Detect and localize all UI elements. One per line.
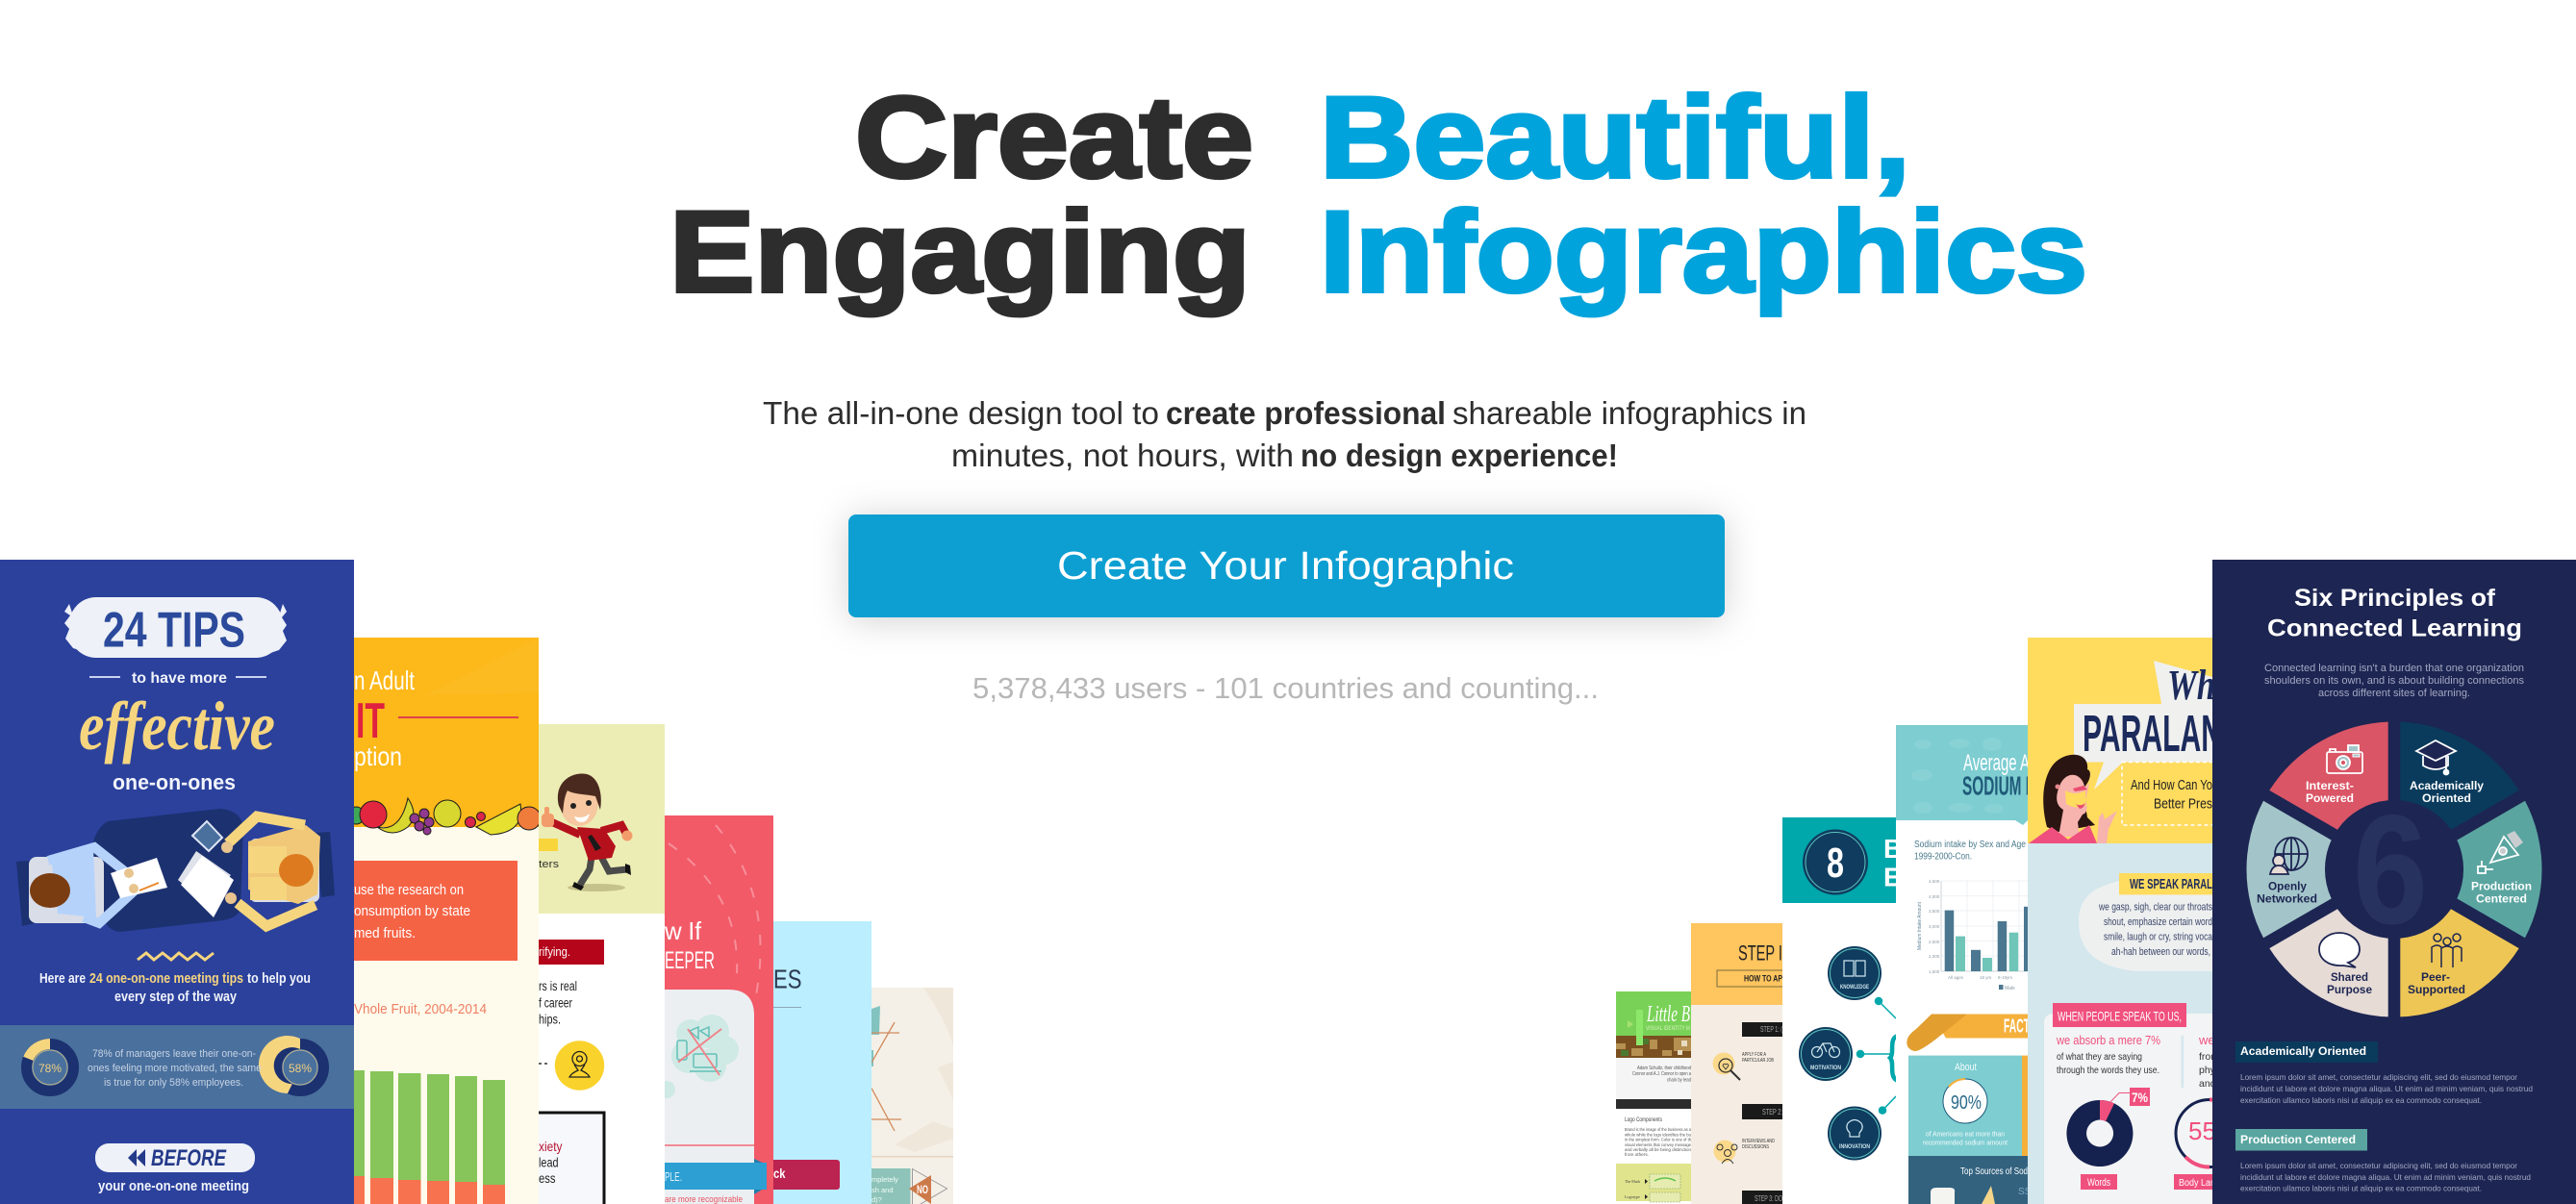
sodium title [1962,750,2030,800]
production centered label: Production Centered [2240,1135,2356,1146]
headline: Engaging [669,188,1250,316]
yellow dashed subtitle box: Better Pres [2154,797,2212,813]
motivation badge [1799,1027,1853,1081]
call to action button: Create Your Infographic [1057,543,1514,588]
stacked bars [354,1070,505,1204]
little b title: Little B [1646,1002,1690,1027]
crimson button: ck [773,1166,786,1181]
six principles title: Six Principles of [2294,585,2496,612]
blue card title: ES [773,964,802,994]
logo components text: in the simplest form. Color is one of th [1625,1137,1691,1142]
card: eight elements [1782,817,1903,1204]
academically oriented text: incididunt ut labore et dolore magna aliqua. Ut enim ad minim veniam, quis nostrud [2240,1084,2533,1093]
subtitle: no design experience! [1301,438,1618,473]
ellipsis dashes [539,1063,547,1065]
script word: Wh [2167,662,2215,709]
teal note [871,1168,910,1204]
lime legend: The Mark [1625,1179,1641,1184]
card: light blue [773,921,871,1204]
band text: 78% of managers leave their one-on- [92,1048,256,1060]
90 percent panel: 90% [1951,1092,1982,1114]
we speak label: WE SPEAK PARAL [2130,876,2212,892]
step 2 caption: DISCUSSIONS [1742,1144,1770,1150]
step tags: STEP 3: DO [1755,1194,1782,1203]
words label: Words [2087,1177,2110,1189]
segment labels: Openly [2268,880,2307,893]
red card title: EEPER [665,947,715,974]
pink heading [2053,1003,2186,1027]
body text [539,979,577,1027]
sodium bar chart: 1,500 [1929,969,1940,974]
blue banner [665,1159,767,1194]
teal header [1896,725,2028,825]
facts ribbon: FACT [2004,1016,2030,1038]
knowledge badge: KNOWLEDGE [1840,985,1869,991]
step title: STEP I [1738,941,1782,966]
top sources panel: SS [2018,1187,2032,1197]
wheel diagram [2246,722,2542,1016]
divider [2182,1036,2184,1088]
faint food icons [1911,738,2004,814]
intro text: 24 one-on-one meeting tips [89,971,243,987]
body language text [2198,1033,2216,1090]
pink rule [665,1144,754,1146]
meeting illustration [16,809,335,932]
top sources panel: Top Sources of Sod [1960,1166,2028,1177]
step tags: STEP 2: [1762,1108,1782,1116]
intro panel: chain by lead [1667,1077,1691,1083]
no decision [909,1169,947,1204]
pie: words 7 percent [2066,1088,2150,1166]
intro panel [1616,1058,1691,1099]
academically oriented label [2235,1041,2378,1063]
arrow [1628,1020,1633,1028]
red tab: rifying. [539,944,570,959]
how to box [1717,970,1794,987]
card: six principles [2212,560,2576,1204]
segment labels: Supported [2408,983,2465,996]
segment labels: Shared [2331,970,2368,984]
body language label [2174,1174,2222,1190]
production centered text: incididunt ut labore et dolore magna aliqua. Ut enim ad minim veniam, quis nostrud [2240,1172,2531,1182]
ring: body language 55 percent: 55 [2188,1116,2216,1145]
zigzag [138,953,214,960]
framed box: lead [539,1154,558,1169]
words text: we absorb a mere 7% [2056,1033,2160,1047]
production centered text: Lorem ipsum dolor sit amet, consectetur adipiscing elit, sed do eiusmod tempor [2240,1161,2517,1170]
headline [669,73,2087,316]
90 percent panel: of Americans eat more than [1926,1130,2005,1139]
dashed arcs [669,825,761,995]
we speak label [2079,873,2225,971]
framed box [539,1112,606,1204]
big six numeral: 6 [2353,783,2428,957]
body language text: we [2198,1033,2215,1047]
body text: f career [539,996,572,1010]
effective script: effective [79,688,275,765]
body language text: phy [2199,1065,2216,1076]
icon: globe and person [2270,838,2308,874]
subtitle: shareable infographics in [1452,395,1806,431]
icon: magnifier heart [1712,1052,1740,1080]
intro panel: Connor and A.J. Connor to open a [1632,1071,1691,1077]
teal shapes [871,1006,880,1066]
chart title: Vhole Fruit, 2004-2014 [354,1002,487,1017]
speech bubble [2074,661,2212,790]
research box [354,861,518,961]
subtitle: minutes, not hours, with [951,438,1294,473]
icon: people [1714,1141,1737,1164]
framed box: xiety [539,1139,562,1154]
yellow dashed subtitle box: And How Can Yo [2131,778,2212,793]
intro text: Here are [39,971,86,987]
fruit title: n Adult [354,665,415,695]
how to box: HOW TO AP [1744,973,1782,983]
segment labels: Peer- [2421,970,2450,984]
user count: 5,378,433 users - 101 countries and counting... [972,671,1599,705]
step 2 caption [1742,1139,1775,1150]
intro panel: Adam Schultz, their childhood [1637,1066,1691,1071]
number badge: 8 [1827,840,1844,887]
subtitle: The all-in-one design tool to [763,395,1159,431]
sodium bar chart: Medium Intake Amount [1917,901,1923,950]
body language text: and [2199,1078,2216,1090]
subtitle: create professional [1166,395,1446,431]
intro text [39,971,311,1005]
call to action button [848,514,1725,617]
facts ribbon [1907,1014,2030,1051]
before badge: BEFORE [151,1145,227,1171]
sodium bar chart: 2,500 [1929,940,1940,944]
intro text: to help you [247,971,311,987]
90 percent panel: recommended sodium amount [1923,1139,2008,1146]
90 percent panel [1908,1056,2028,1156]
one-on-ones: one-on-ones [113,770,236,794]
card: beige flowchart [871,988,953,1204]
rule [871,1156,953,1158]
fruit title: IT [356,693,385,749]
blob text: shout, emphasize certain word [2104,916,2212,928]
donut 58%: 58% [289,1062,312,1075]
donut 78% [23,1039,73,1091]
six principles intro [2264,663,2524,699]
six principles title [2267,585,2522,642]
motivation badge: MOTIVATION [1810,1066,1841,1071]
teal note: sh and [871,1186,894,1194]
step 1 caption: PARTICULAR JOB [1742,1058,1775,1064]
step tags: STEP 1: ( [1760,1025,1782,1034]
step 1 caption [1742,1052,1775,1064]
segment labels: Powered [2306,791,2354,805]
icon: pen tool [2478,831,2523,873]
tab caption: ters [539,859,560,870]
green accent bar [1636,1010,1643,1045]
segment labels: Purpose [2327,983,2372,996]
teal note: mpletely [871,1175,898,1184]
body text: hips. [539,1012,561,1027]
yellow dashed subtitle box [2122,762,2228,825]
sodium bar chart: 4,500 [1929,879,1940,884]
segment labels: Centered [2476,892,2527,906]
words text: through the words they use. [2057,1066,2159,1076]
headline: Infographics [1320,188,2087,316]
photo strip [1616,1036,1691,1058]
sodium bar chart: Male [2005,986,2015,991]
band text: ones feeling more motivated, the same [88,1063,262,1074]
fruit row [347,798,541,835]
red tab [539,940,604,965]
donut 58% [259,1036,323,1093]
six principles intro: across different sites of learning. [2318,688,2470,699]
red card title [665,921,714,968]
ring: body language 55 percent [2176,1100,2243,1167]
logo components text: Brand is the image of the business as a [1625,1127,1691,1132]
headline: Create [855,73,1253,202]
teal note: d)? [871,1195,882,1204]
research box: use the research on [354,883,464,898]
gray panel [665,990,754,1204]
woman illustration [2029,755,2117,843]
card: sodium intake [1896,725,2032,1204]
card: 24 tips [0,560,354,1204]
segment labels: Production [2471,880,2532,893]
research box: med fruits. [354,926,416,941]
six principles intro: shoulders on its own, and is about building connections [2264,675,2524,687]
teal card title [1883,834,1903,892]
six principles intro: Connected learning isn't a burden that one organization [2264,663,2524,674]
donut 78%: 78% [38,1062,62,1075]
headline: Beautiful, [1320,73,1910,202]
chart caption: 1999-2000-Con. [1914,852,1972,862]
six principles title: Connected Learning [2267,615,2522,642]
teal card title: E [1883,862,1902,892]
card: sleeper red [654,815,773,1204]
fruit title: ption [354,741,402,771]
subtitle [763,395,1806,473]
sodium bar chart: 3,500 [1929,909,1940,914]
intro text: every step of the way [114,990,237,1005]
blob text: we gasp, sigh, clear our throats [2098,902,2212,914]
production centered label [2235,1129,2367,1150]
academically oriented label: Academically Oriented [2240,1046,2366,1058]
card: fruit consumption [347,638,541,1204]
research box: onsumption by state [354,904,470,919]
paper texture [895,988,953,1152]
wheel segments [2246,722,2542,1016]
24 tips badge: 24 TIPS [103,602,245,658]
segment labels: Interest- [2306,779,2354,792]
words text [2056,1033,2160,1076]
dark band [1616,1099,1691,1109]
pink heading: WHEN PEOPLE SPEAK TO US, [2058,1008,2182,1023]
brace [1890,1036,1898,1081]
blob text: smile, laugh or cry, string voca [2104,931,2213,942]
teal card title: B [1883,834,1903,864]
words label [2081,1174,2117,1190]
connectors [1856,998,1896,1114]
logo components text: and verbally all be being distinction [1625,1147,1691,1152]
90 percent panel: About [1955,1062,1977,1073]
sodium bar chart: 4,000 [1929,894,1940,899]
body text: rs is real [539,979,577,993]
innovation badge [1828,1106,1881,1160]
white panel [2044,1014,2236,1204]
before badge [95,1143,255,1172]
card: career anxiety [527,724,665,1204]
band text [88,1048,262,1089]
number badge [1803,829,1868,894]
body language text: fron [2199,1051,2216,1063]
before caption: your one-on-one meeting [98,1179,249,1194]
blob text: ah-hah between our words, [2111,946,2210,958]
sodium bar chart: 3,000 [1929,924,1940,929]
lime legend: Logotype [1625,1194,1640,1199]
step 1 caption: APPLY FOR A [1742,1052,1767,1058]
card: paralanguage [2028,638,2243,1204]
production centered text [2240,1161,2531,1192]
pie: words 7 percent: 7% [2132,1090,2148,1105]
sodium title: Average A [1963,750,2030,776]
chart caption [1914,840,2026,862]
academically oriented text: Lorem ipsum dolor sit amet, consectetur adipiscing elit, sed do eiusmod tempor [2240,1072,2517,1082]
icon: yellow circle [555,1041,604,1091]
body language label: Body Lan [2179,1178,2215,1189]
segment labels: Networked [2257,892,2317,906]
academically oriented text: exercitation ullamco laboris nisi ut aliquip ex ea commodo consequat. [2240,1095,2482,1105]
statistics band [0,1025,354,1109]
icon: graduation cap [2416,740,2456,775]
sodium bar chart [1917,879,2029,991]
framed box: ess [539,1170,556,1186]
yellow tab [539,839,558,851]
innovation badge: INNOVATION [1839,1144,1870,1150]
words text: of what they are saying [2057,1052,2142,1063]
segment labels: Academically [2410,779,2484,792]
card: little b visual identity [1616,991,1691,1204]
knowledge badge [1828,946,1881,1000]
sodium bar chart: All ages [1948,975,1964,980]
logo components text: visual elements that convey message [1625,1142,1691,1147]
running man illustration [542,773,633,891]
production centered text: exercitation ullamco laboris nisi ut aliquip ex ea commodo consequat. [2240,1183,2482,1192]
chart caption: Sodium intake by Sex and Age [1914,840,2026,850]
sodium bar chart: 2,000 [1929,954,1940,959]
logo components text [1625,1117,1691,1157]
icon: team [2432,934,2462,967]
step tags [1742,1022,1790,1204]
crimson button [760,1160,840,1190]
logo components text: whole while the logo identifies the bu [1625,1133,1691,1137]
icon: camera [2327,745,2362,773]
fruit title [354,665,518,771]
step 2 caption: INTERVIEWS AND [1742,1139,1775,1144]
logo components text: Logo Components [1625,1117,1662,1123]
icon: crossed items in cloud [658,1015,739,1098]
rule [773,1007,801,1008]
to have more: to have more [132,670,227,687]
logo components text: from others. [1625,1152,1649,1157]
segment labels: Oriented [2422,791,2471,805]
red card title: w If [664,916,702,945]
academically oriented text [2240,1072,2533,1105]
card: step by step [1691,923,1794,1204]
sodium title: SODIUM I [1962,770,2030,800]
paralanguage title: PARALAN [2083,705,2222,763]
sodium bar chart: 18 yrs [1980,975,1992,980]
blue banner: PLE. [665,1169,682,1184]
subtitle: VISUAL IDENTITY M [1646,1026,1690,1032]
top sources panel [1908,1156,2032,1204]
icon: speech bubble [2319,933,2360,967]
segment labels [2257,779,2532,996]
lime legend [1616,1164,1691,1202]
band text: is true for only 58% employees. [104,1077,243,1089]
no decision: NO [917,1183,928,1196]
flow lines [871,1022,901,1131]
blob text [2098,902,2213,958]
sodium bar chart: 8-19yrs [1998,975,2013,980]
